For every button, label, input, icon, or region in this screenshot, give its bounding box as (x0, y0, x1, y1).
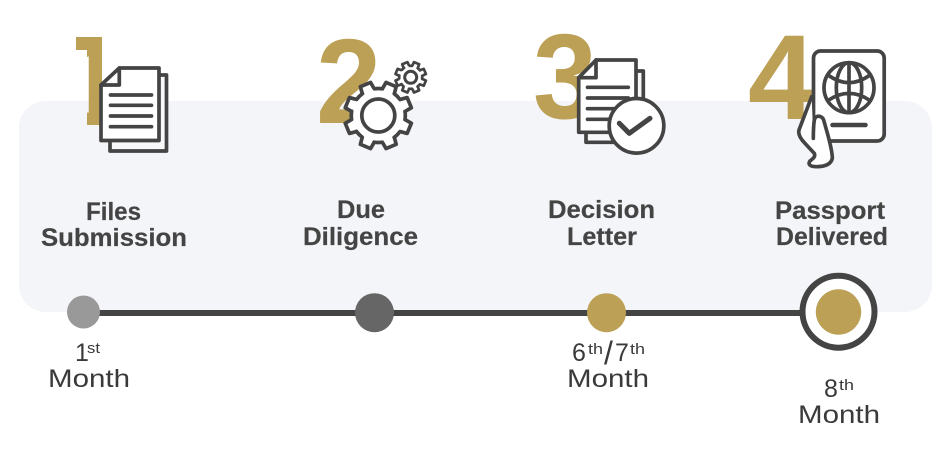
label: 6th/7th month: th (630, 341, 645, 358)
label: 6th/7th month (567, 335, 649, 393)
icon: approved document (579, 60, 664, 153)
marker: 6th/7th month (587, 293, 626, 332)
marker: 8th month (802, 276, 874, 348)
large gear (345, 82, 412, 149)
label: 6th/7th month: th (588, 341, 603, 358)
icon: passport in hand (799, 51, 884, 167)
step 3 number: 3 (533, 9, 597, 145)
marker: 1st month (67, 296, 100, 328)
label: 8th month: Month (798, 401, 880, 429)
icon: gears (345, 62, 426, 149)
step 2 number: 2 (316, 14, 381, 149)
label: 8th month: th (839, 377, 854, 394)
label: 6th/7th month: 7 (615, 339, 629, 367)
label: Due Diligence (303, 196, 418, 251)
step 1 number (76, 37, 102, 125)
step 4 number: 4 (748, 9, 815, 145)
small gear (395, 62, 426, 93)
icon: documents (101, 68, 166, 151)
label: 6th/7th month: / (604, 335, 613, 371)
label: Passport Delivered: Passport (775, 197, 886, 225)
label: 6th/7th month: Month (567, 365, 649, 393)
label: 1st month (48, 339, 130, 393)
label: Decision Letter (548, 196, 655, 251)
label: 8th month (798, 375, 880, 429)
label: Files Submission: Files (86, 198, 141, 226)
timeline (67, 276, 874, 348)
label: Files Submission (41, 198, 187, 252)
background panel (19, 101, 932, 312)
label: Files Submission: Submission (41, 224, 187, 252)
marker: due diligence (355, 293, 394, 332)
label: 1st month: st (87, 340, 101, 357)
label: 8th month: 8 (824, 375, 838, 403)
label: 1st month: Month (48, 365, 130, 393)
label: Passport Delivered: Delivered (776, 223, 888, 251)
label: Passport Delivered (775, 197, 888, 251)
step 1 number: 1 (60, 15, 128, 151)
label: Decision Letter: Decision (548, 196, 655, 224)
label: 1st month: 1 (75, 339, 89, 367)
label: Due Diligence: Diligence (303, 223, 418, 251)
label: 6th/7th month: 6 (572, 339, 586, 367)
label: Due Diligence: Due (337, 196, 385, 224)
label: Decision Letter: Letter (567, 223, 637, 251)
